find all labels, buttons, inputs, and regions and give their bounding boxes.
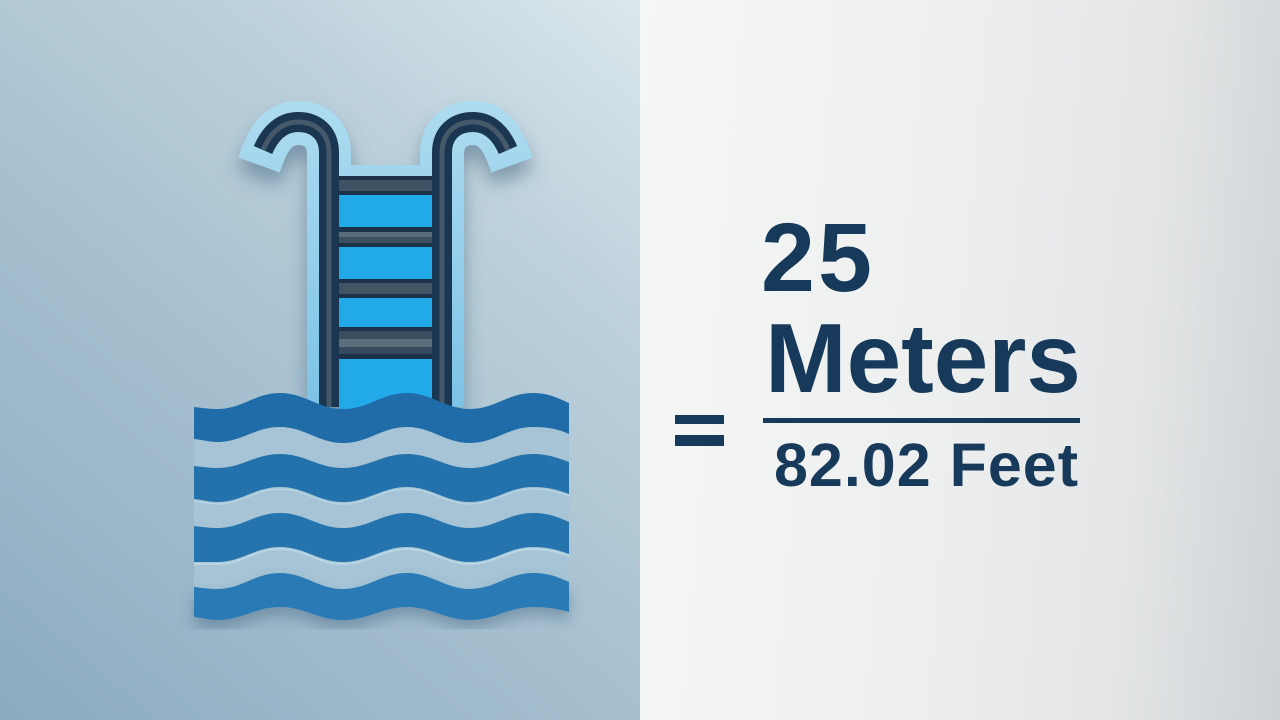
icon: waves [194,393,569,620]
heading: 25: 25 [761,203,875,312]
heading: Meters: Meters [765,303,1081,413]
left rail [263,122,329,407]
panel: right background [640,0,1280,720]
fraction divider [763,418,1080,423]
icon: pool ladder and water [188,101,575,630]
light wave bands [194,423,569,593]
rungs [339,176,432,359]
wave 2 [194,454,569,502]
right rail [442,122,508,407]
ladder backing outline [259,123,512,407]
wave highlights [194,489,569,564]
equals sign [675,415,724,446]
panel: left background [0,0,640,720]
wave 1 [194,393,569,443]
wave 3 [194,513,569,562]
text: 82.02 Feet: 82.02 Feet [774,431,1079,499]
icon: ladder [259,122,512,410]
ladder blue panels [339,190,432,410]
wave 4 [194,573,569,620]
